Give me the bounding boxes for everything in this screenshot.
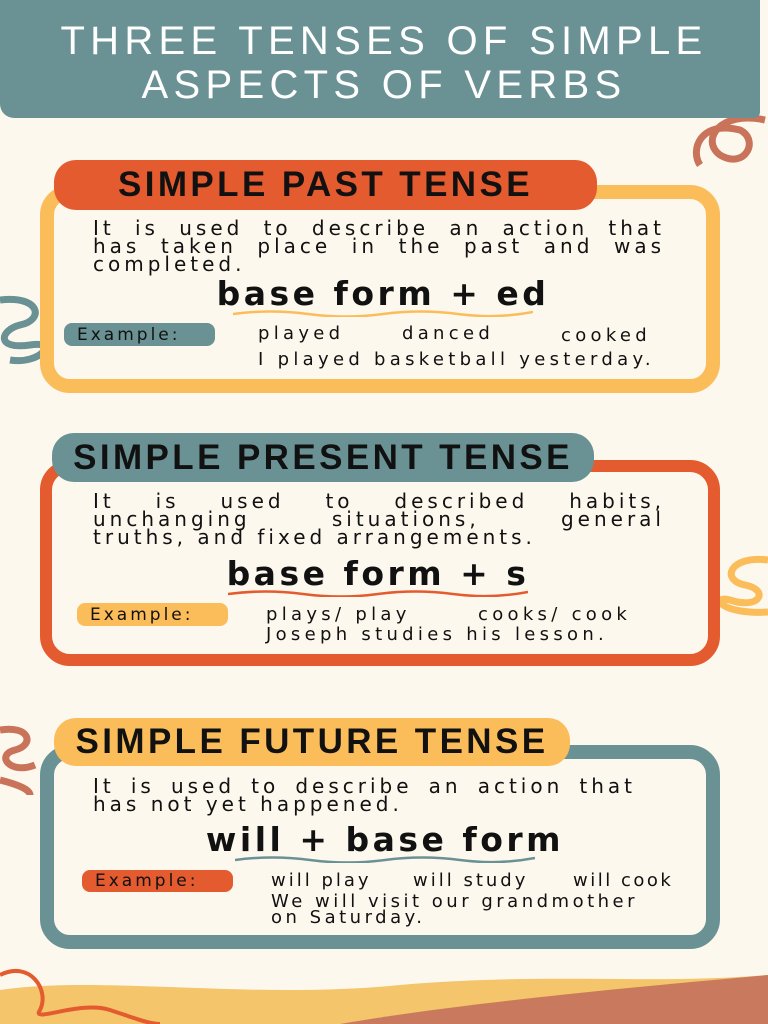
panel: simple past [40,160,720,393]
text: past description [93,216,665,276]
examples: plays/ play [266,604,411,625]
examples: played [258,323,344,344]
text: future description [93,774,636,816]
formula: will + base form: will + base form [206,820,564,859]
panel: simple past: cooked [561,325,651,346]
heading: simple past tense: SIMPLE PAST TENSE [118,165,533,204]
panel: simple future [40,718,720,949]
panel: simple future: will cook [573,870,673,891]
example label: Example: [90,604,193,624]
heading: simple future tense: SIMPLE FUTURE TENSE [76,722,548,761]
title [60,19,708,107]
title: ASPECTS OF VERBS [142,63,626,107]
panel: simple present [40,433,720,666]
panel: simple future: on Saturday. [271,907,425,928]
text: past description: has taken place in the past and was [93,234,665,258]
title: THREE TENSES OF SIMPLE [60,19,708,63]
panel: simple present: Joseph studies his lesson. [266,624,608,645]
example label [77,603,228,626]
text: past description: It is used to describe an action that [93,216,665,240]
example label: Example: [77,324,180,344]
panel: simple future: will study [413,870,528,891]
text: future description: It is used to describe an action that [93,774,636,798]
example label: Example: [95,871,198,891]
formula: base form + ed: base form + ed [217,274,549,313]
text: future description: has not yet happened. [93,792,403,816]
text: present description: truths, and fixed arrangements. [93,525,536,549]
examples: will play [271,870,372,891]
panel: simple present: cooks/ cook [478,604,631,625]
text: present description: unchanging situations, general [93,507,665,531]
text: present description [93,489,665,549]
example label [82,870,233,892]
heading: simple past tense [54,160,597,210]
example label [64,323,215,346]
heading: simple present tense: SIMPLE PRESENT TENSE [73,438,573,476]
panel: simple past: danced [402,323,494,344]
text: present description: It is used to described habits, [93,489,665,513]
panel: simple past: I played basketball yesterday. [258,349,655,370]
header banner [0,0,760,118]
panel: simple future: We will visit our grandmother [271,891,638,912]
formula: base form + s: base form + s [227,554,529,593]
text: past description: completed. [93,252,245,276]
